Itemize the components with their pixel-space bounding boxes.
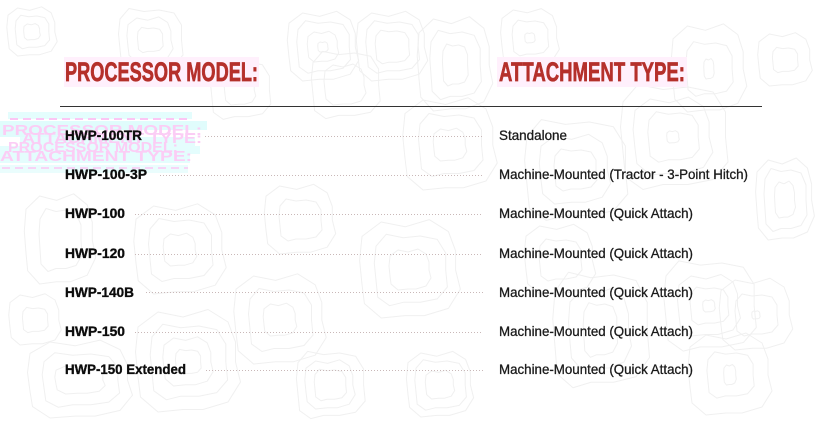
ghost artifact: overlapping text block bbox=[0, 112, 207, 173]
row: HWP-100TR bbox=[65, 127, 567, 143]
row: HWP-140B: HWP-140B bbox=[65, 284, 134, 300]
row: HWP-150 Extended bbox=[65, 361, 693, 377]
row: HWP-150 bbox=[65, 323, 693, 339]
row: HWP-100 bbox=[65, 205, 693, 221]
heading: attachment type: ATTACHMENT TYPE: bbox=[499, 57, 685, 87]
ghost artifact: overlapping text block: ATTACHMENT TYPE: bbox=[0, 148, 192, 165]
row: HWP-150 Extended: HWP-150 Extended bbox=[65, 361, 186, 377]
row: HWP-100-3P bbox=[65, 166, 748, 182]
row: HWP-120: HWP-120 bbox=[65, 245, 125, 261]
row: HWP-100-3P: HWP-100-3P bbox=[65, 166, 147, 182]
row: HWP-100TR: Standalone bbox=[499, 127, 567, 143]
row: HWP-140B bbox=[65, 284, 693, 300]
ghost artifact: overlapping text block: PROCESSOR MODEL: bbox=[2, 122, 202, 139]
ghost artifact: overlapping text block: ATTACHMENT TYPE: bbox=[22, 130, 202, 147]
ghost artifact: left heading label bbox=[64, 57, 259, 87]
row: HWP-150 Extended: Machine-Mounted (Quick Attach) bbox=[499, 361, 693, 377]
row: HWP-100-3P: Machine-Mounted (Tractor - 3-Point Hitch) bbox=[499, 166, 748, 182]
header divider bbox=[60, 106, 762, 108]
row: HWP-140B: Machine-Mounted (Quick Attach) bbox=[499, 284, 693, 300]
row: HWP-150: Machine-Mounted (Quick Attach) bbox=[499, 323, 693, 339]
row: HWP-100TR: HWP-100TR bbox=[65, 127, 142, 143]
row: HWP-100: HWP-100 bbox=[65, 205, 125, 221]
row: HWP-120 bbox=[65, 245, 693, 261]
heading: processor model: PROCESSOR MODEL: bbox=[65, 57, 258, 87]
ghost artifact: right heading label bbox=[497, 57, 687, 87]
row: HWP-120: Machine-Mounted (Quick Attach) bbox=[499, 245, 693, 261]
ghost artifact: overlapping text block: PROCESSOR MODEL: bbox=[8, 139, 178, 156]
row: HWP-100: Machine-Mounted (Quick Attach) bbox=[499, 205, 693, 221]
row: HWP-150: HWP-150 bbox=[65, 323, 125, 339]
